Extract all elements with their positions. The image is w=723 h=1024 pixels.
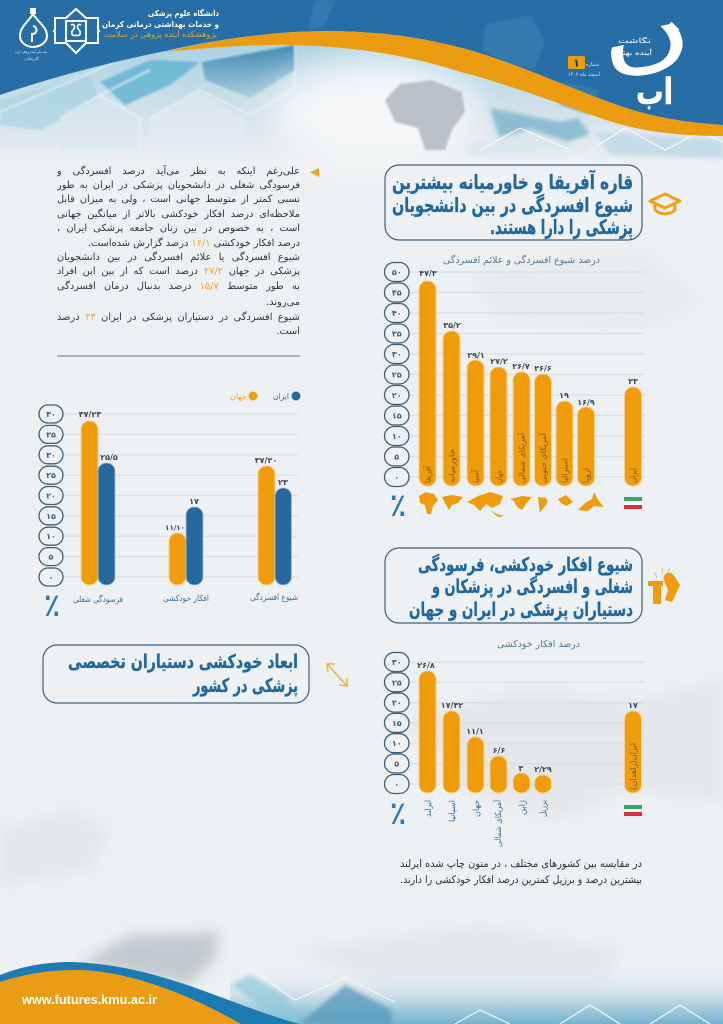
bar chart: depression prevalence by region: اروپا (582, 468, 591, 483)
percent sign chart one: ٪ (390, 486, 406, 524)
text block: intro paragraph: پزشکی در جهان ۲۷/۲ درصد است که از بین این افراد (57, 266, 300, 277)
bar chart: depression prevalence by region: ۴۷/۳ (419, 269, 437, 278)
bar chart: suicidal thoughts by country: ایرلند (424, 800, 434, 817)
bar chart: Iran versus world (39, 405, 298, 605)
bar chart: depression prevalence by region: آمریکای جنوبی (538, 432, 548, 483)
bar chart: depression prevalence by region: خاورمیانه (448, 449, 456, 483)
text block: intro paragraph: به طور متوسط ۱۵/۷ درصد بدنبال درمان افسردگی (57, 281, 300, 292)
title: dimensions of resident suicide: پزشکی در کشور (192, 675, 298, 697)
icons: continents (419, 492, 604, 517)
text block: intro paragraph: است. (276, 326, 300, 337)
bar chart: depression prevalence by region: ۲۰ (392, 391, 402, 400)
text block: intro paragraph: فرسودگی شغلی در دانشجویان پزشکی در ایران به طور (57, 180, 300, 191)
bar chart: depression prevalence by region: ۳۵/۲ (443, 321, 461, 330)
bar chart: Iran versus world: ۵ (49, 553, 54, 562)
bar chart: Iran versus world: فرسودگی شغلی (73, 594, 123, 605)
logo: nab wordmark: آینده بهتر (617, 48, 653, 57)
issue number badge: ۱ (573, 56, 580, 70)
bar chart: depression prevalence by region: ۲۶/۶ (534, 364, 552, 373)
bar chart: depression prevalence by region: ۲۷/۲ (490, 357, 508, 366)
legend (230, 392, 300, 401)
bar chart: depression prevalence by region: جهان (494, 470, 504, 483)
header text: university name (102, 8, 219, 39)
title: Africa and Middle East: شیوع افسردگی در بین دانشجویان (392, 193, 633, 217)
caption: country comparison: بیشترین درصد و برزیل کمترین درصد افکار خودکشی را دارند.‏ (400, 874, 642, 886)
marker: text bullet (310, 168, 319, 177)
header blue band (0, 0, 723, 125)
bar chart: depression prevalence by region: ۱۶/۹ (577, 398, 595, 407)
chart subtitle: suicidal thoughts: درصد افکار خودکشی (497, 639, 580, 650)
bar chart: suicidal thoughts by country: ژاپن (518, 800, 528, 815)
bar chart: Iran versus world: ۳۵ (46, 430, 56, 439)
bar chart: Iran versus world: ۱۱/۱۰ (165, 524, 185, 532)
bar chart: suicidal thoughts by country: برزیل (539, 800, 549, 817)
icon: Iran flag chart three (624, 805, 642, 816)
bar chart: depression prevalence by region: آسیا (470, 469, 480, 483)
bar chart: suicidal thoughts by country: ۵ (394, 760, 399, 768)
bar chart: Iran versus world: ۳۰ (46, 451, 56, 460)
bar chart: Iran versus world: شیوع افسردگی (250, 592, 298, 603)
caption: country comparison (400, 858, 642, 886)
title: Africa and Middle East (385, 165, 642, 240)
logo: nab wordmark: نگاشت (618, 36, 651, 45)
bar chart: depression prevalence by region: ۳۰ (392, 350, 402, 359)
legend: جهان (230, 392, 247, 401)
bar chart: Iran versus world: ۲۵/۵ (100, 453, 118, 462)
bar chart: suicidal thoughts by country: ۱۰ (392, 739, 402, 748)
icon: Iran flag chart one (624, 497, 642, 509)
logo: ministry shield: کرمان (24, 56, 39, 61)
header text: university name: دانشگاه علوم پزشکی (148, 8, 219, 18)
header map on blue (308, 0, 600, 115)
bar chart: Iran versus world: ۱۰ (46, 532, 56, 541)
bar chart: suicidal thoughts by country: ۱۵ (392, 719, 402, 728)
title: Africa and Middle East: پزشکی را دارا هستند.‏ (490, 215, 633, 240)
bar chart: depression prevalence by region (384, 262, 645, 486)
header text: university name: پژوهشکده آینده پژوهی در سلامت (104, 29, 217, 39)
text block: intro paragraph: می‌روند. (266, 297, 300, 308)
bar chart: depression prevalence by region: آمریکای شمالی (516, 432, 526, 483)
bar chart: depression prevalence by region: ۲۵ (392, 370, 402, 380)
issue number badge (568, 56, 600, 78)
logo: nab wordmark (589, 0, 698, 113)
title: suicide ideation and burnout (385, 548, 642, 623)
logo: ministry shield: سند ملی آینده پژوهی ایران (15, 49, 47, 54)
text block: intro paragraph: علی‌رغم اینکه به نظر می‌آید درصد افسردگی و (57, 166, 300, 177)
bar chart: depression prevalence by region: ۲۶/۷ (512, 362, 530, 371)
footer orange corner (0, 970, 241, 1024)
bar chart: depression prevalence by region: آفریقا (422, 465, 432, 483)
bar chart: depression prevalence by region: ۱۵ (392, 412, 402, 420)
bar chart: Iran versus world: ۲۰ (46, 492, 56, 500)
logo: university emblem (54, 9, 99, 53)
bar chart: suicidal thoughts by country: آمریکای شمالی (492, 799, 504, 847)
text block: intro paragraph: نسبی کمتر از متوسط جهانی است ، ولی به میزان قابل (57, 194, 300, 205)
bar chart: depression prevalence by region: ۲۹/۱ (467, 351, 485, 360)
background: faint world map (0, 250, 723, 1000)
text block: intro paragraph (57, 165, 300, 337)
bar chart: suicidal thoughts by country: ۳۰ (392, 658, 402, 667)
bar chart: suicidal thoughts by country: ۱۷ (628, 701, 638, 710)
bar chart: depression prevalence by region: ۴۵ (392, 288, 402, 298)
bar chart: depression prevalence by region: ۱۹ (559, 391, 569, 400)
caption: country comparison: در مقایسه بین کشورهای مختلف ، در متون چاپ شده ایرلند (400, 858, 642, 870)
title: dimensions of resident suicide (43, 645, 309, 703)
logo: ministry shield (15, 8, 47, 61)
footer: map and teal hexagons (80, 932, 723, 1024)
percent sign chart three: ٪ (390, 794, 406, 832)
percent sign chart two: ٪ (44, 586, 60, 624)
bar chart: Iran versus world: ۰ (49, 573, 53, 582)
bar chart: suicidal thoughts by country: ۲۶/۸ (417, 661, 435, 670)
title: dimensions of resident suicide: ابعاد خودکشی دستیاران تخصصی (68, 651, 298, 673)
icon: graduation cap (650, 194, 680, 214)
background: header image fade (0, 40, 723, 165)
bar chart: suicidal thoughts by country: ۲/۲۹ (534, 765, 552, 774)
text block: intro paragraph: درصد افکار خودکشی ۱۶/۱ درصد گزارش شده‌است. (88, 238, 300, 249)
bar chart: depression prevalence by region: ایران (629, 468, 638, 483)
icon: exhausted person (648, 568, 680, 604)
text block: intro paragraph: است ، به خصوص در بین زنان جامعه پزشکی ایران ، (57, 223, 300, 234)
background: map of Africa and teal hexagons (385, 80, 723, 158)
bar chart: depression prevalence by region: ۰ (394, 473, 399, 482)
bar chart: suicidal thoughts by country: ایران(زاهدان) (629, 743, 638, 790)
bar chart: suicidal thoughts by country: جهان (472, 800, 482, 817)
header text: university name: و خدمات بهداشتی درمانی کرمان (102, 20, 219, 29)
bar chart: Iran versus world: ۱۷ (189, 497, 199, 506)
text block: intro paragraph: شیوع افسردگی یا علائم افسردگی در بین دانشجویان (57, 252, 300, 263)
header orange swoosh (165, 31, 723, 136)
legend: ایران (273, 392, 289, 401)
background: whitened centre behind Africa (270, 60, 480, 170)
footer url: www.futures.kmu.ac.ir (21, 993, 157, 1007)
bar chart: Iran versus world: ۳۷/۲۳ (79, 410, 101, 419)
bar chart: suicidal thoughts by country: ۰ (394, 780, 399, 789)
bar chart: depression prevalence by region: ۵ (394, 452, 399, 462)
bar chart: Iran versus world: ۳۷/۲۰ (255, 456, 277, 465)
bar chart: suicidal thoughts by country (384, 652, 645, 847)
divider under text (57, 355, 300, 357)
bar chart: suicidal thoughts by country: ۳ (519, 764, 524, 773)
text block: intro paragraph: شیوع افسردگی در دستیاران پزشکی در ایران ۲۳ درصد (57, 312, 300, 323)
footer blue swoosh (0, 962, 300, 1024)
title: Africa and Middle East: قاره آفریقا و خاورمیانه بیشترین (392, 169, 633, 194)
text block: intro paragraph: ملاحظه‌ای درصد افکار خودکشی بالاتر از میانگین جهانی (57, 209, 300, 220)
title: suicide ideation and burnout: شیوع افکار خودکشی، فرسودگی (418, 553, 633, 576)
bar chart: Iran versus world: ۱۵ (46, 512, 56, 521)
bar chart: depression prevalence by region: ۱۰ (392, 432, 402, 441)
chart subtitle: depression prevalence: درصد شیوع افسردگی و علائم افسردگی (443, 254, 600, 266)
issue number badge: شماره (586, 62, 599, 68)
issue number badge: اسفند ماه ۱۴۰۲ (568, 72, 600, 78)
bar chart: depression prevalence by region: استرالیا (560, 458, 570, 483)
bar chart: suicidal thoughts by country: ۱۷/۳۲ (441, 701, 463, 710)
background: top left hexagon texture (0, 45, 295, 150)
bar chart: suicidal thoughts by country: اسپانیا (448, 800, 458, 822)
bar chart: depression prevalence by region: ۳۵ (392, 330, 402, 338)
title: suicide ideation and burnout: دستیاران پزشکی در ایران و جهان (409, 599, 633, 621)
logo: nab wordmark: اب (636, 72, 673, 113)
bar chart: suicidal thoughts by country: ۲۰ (392, 699, 402, 708)
bar chart: Iran versus world: ۴۰ (46, 410, 56, 419)
title: suicide ideation and burnout: شغلی و افسردگی در پزشکان و (431, 575, 633, 598)
bar chart: Iran versus world: ۲۵ (46, 471, 56, 480)
bar chart: suicidal thoughts by country: ۶/۶ (493, 746, 505, 755)
bar chart: Iran versus world: افکار خودکشی (163, 594, 209, 604)
bar chart: depression prevalence by region: ۲۳ (628, 377, 638, 386)
bar chart: suicidal thoughts by country: ۱۱/۱ (466, 727, 484, 736)
bar chart: depression prevalence by region: ۵۰ (392, 268, 402, 277)
icon: diagonal double arrow (327, 664, 347, 686)
bar chart: suicidal thoughts by country: ۲۵ (392, 678, 402, 687)
bar chart: depression prevalence by region: ۴۰ (392, 309, 402, 318)
bar chart: Iran versus world: ۲۳ (278, 478, 288, 487)
